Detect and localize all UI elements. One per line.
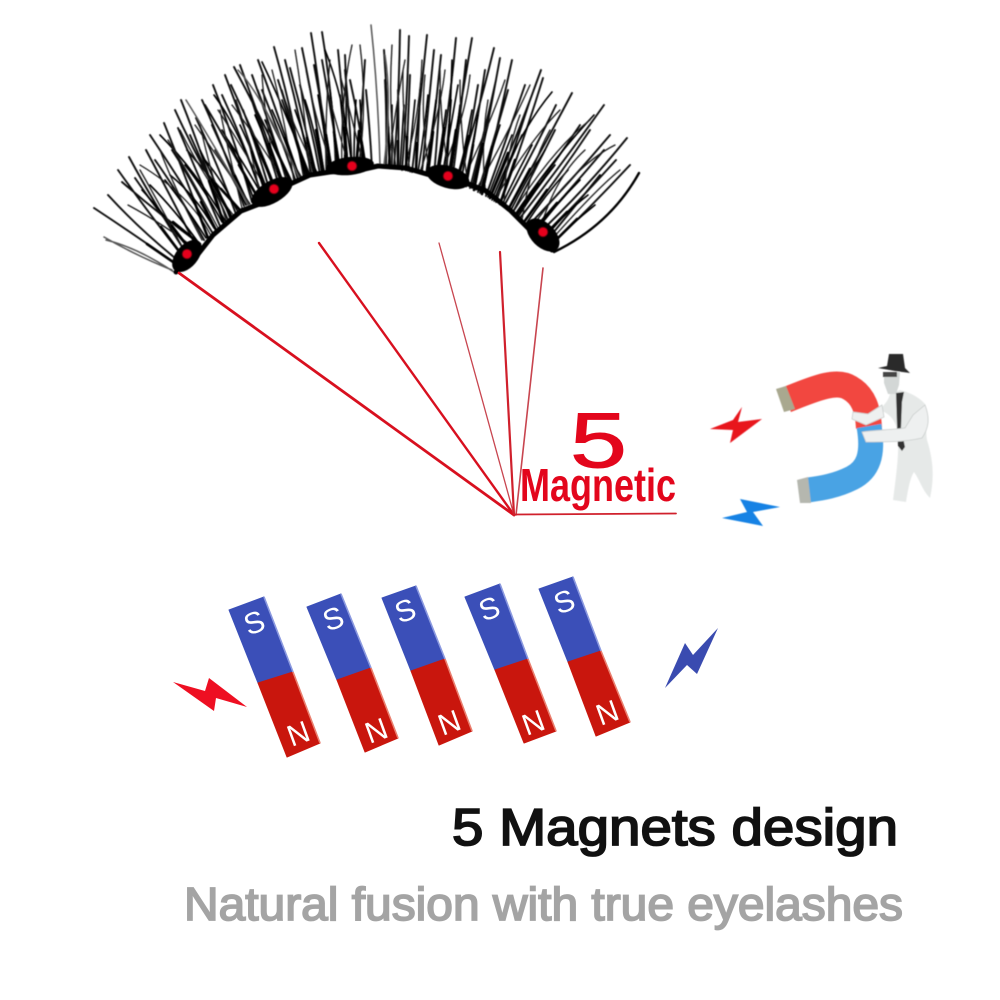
magnet clumps	[166, 155, 566, 278]
magnet blue arm	[808, 426, 871, 490]
figure arms over magnet	[852, 405, 928, 442]
hat	[878, 354, 910, 373]
icon: blue lightning right of bars	[665, 628, 718, 688]
magnet dot 4	[443, 171, 453, 181]
row of five bar magnets	[229, 577, 630, 757]
lash hairs: crossing third layer	[128, 45, 620, 254]
red pointer lines from magnets	[179, 243, 676, 515]
bar magnet 1	[229, 597, 320, 757]
bar magnet 1: N	[283, 715, 314, 754]
bar magnet 2: S	[318, 600, 349, 638]
horseshoe magnet illustration with figure	[710, 354, 933, 526]
title: 5 Magnets design	[452, 799, 898, 857]
lash hairs: primary layer	[94, 30, 630, 264]
pointer line 2	[319, 243, 514, 515]
pointer line 5	[516, 268, 543, 515]
clump around dot 1	[166, 234, 208, 278]
magnet red arm	[786, 384, 869, 428]
figure head	[884, 372, 900, 394]
curved outer hair	[554, 173, 639, 252]
pointer line 1	[179, 273, 514, 515]
figure: man behind magnet	[878, 354, 933, 502]
label: 5 Magnetic	[520, 396, 676, 511]
magnet red tip	[776, 386, 795, 412]
sunglasses	[883, 372, 897, 377]
magnet dot 2	[269, 184, 279, 194]
magnet dot 5	[538, 227, 548, 237]
lash hairs: dense second layer	[142, 50, 595, 250]
bar magnet 1: S	[239, 604, 270, 642]
bar magnet 3	[382, 586, 472, 745]
figure body	[880, 390, 933, 502]
long thin hairs	[104, 25, 388, 272]
lash roots: thick short strokes	[147, 127, 577, 264]
eyelash strip	[94, 25, 639, 278]
icon: red lightning left of bars	[173, 678, 247, 711]
magnet blue tip	[797, 477, 811, 503]
tie	[896, 392, 905, 451]
bar magnet 4: S	[474, 590, 505, 628]
pointer line 3	[439, 243, 514, 515]
lash band	[176, 166, 552, 272]
clump around dot 4	[424, 160, 472, 194]
subtitle: Natural fusion with true eyelashes	[184, 878, 903, 930]
bar magnet 3: N	[434, 704, 465, 743]
bar magnet 4	[465, 584, 556, 743]
pointer line 4	[500, 252, 514, 515]
magnet dot 1	[182, 249, 192, 259]
bar magnet 4: N	[518, 704, 549, 743]
baseline	[514, 514, 676, 515]
bar magnet 2	[307, 594, 398, 752]
bar magnet 5: N	[592, 694, 623, 733]
bar magnet 5: S	[549, 583, 580, 621]
icon: red lightning	[710, 407, 762, 443]
bar magnet 5	[539, 577, 630, 736]
magnet dot 3	[347, 161, 357, 171]
bar magnet 3: S	[390, 592, 421, 630]
clump around dot 2	[247, 171, 297, 213]
bar magnet 2: N	[361, 712, 392, 751]
clump around dot 5	[520, 212, 566, 258]
numeral 5: 5	[570, 396, 627, 484]
icon: blue lightning	[722, 499, 780, 526]
clump around dot 3	[325, 155, 375, 177]
word Magnetic: Magnetic	[520, 459, 676, 511]
